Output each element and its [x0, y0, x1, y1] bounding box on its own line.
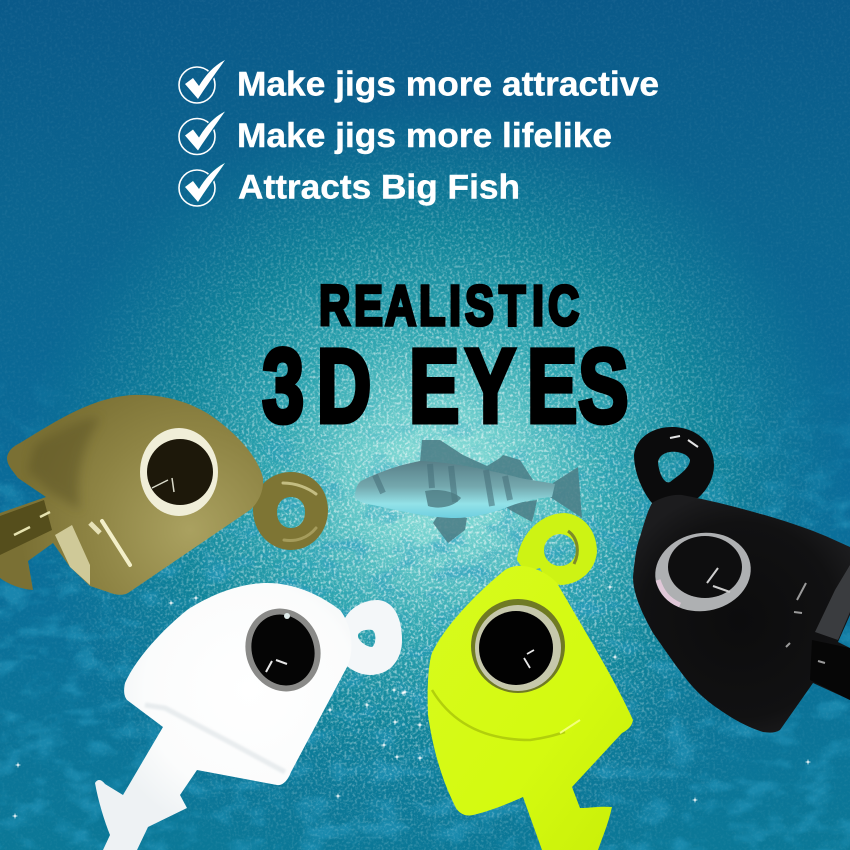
- eye: [471, 599, 565, 693]
- jig: olive: [0, 395, 328, 595]
- check item 2: Make jigs more lifelike: [237, 117, 612, 155]
- eye: [140, 428, 218, 516]
- check item 3: Attracts Big Fish: [238, 168, 520, 206]
- jig: black: [633, 427, 850, 733]
- eyelet: [517, 513, 597, 585]
- fins and tail: [420, 440, 582, 543]
- jig: lime: [428, 513, 633, 850]
- heading: REALISTIC: [319, 273, 579, 337]
- body and hook: [633, 495, 850, 733]
- stripes: [375, 464, 510, 506]
- heading: 3D EYES: [262, 328, 629, 445]
- check item 1: Make jigs more attractive: [237, 66, 659, 104]
- check item 3: [179, 163, 520, 206]
- body and hook: [428, 566, 633, 850]
- eyelet: [340, 600, 402, 675]
- body and hook: [0, 395, 263, 595]
- eye: [649, 525, 757, 619]
- fish: [355, 440, 582, 543]
- eyelet: [253, 472, 328, 550]
- checklist: [179, 60, 659, 206]
- heading: [262, 273, 629, 445]
- eye: [234, 598, 332, 702]
- eyelet: [634, 427, 714, 503]
- body: [355, 461, 555, 518]
- body and hook: [95, 583, 351, 850]
- jig: white: [95, 583, 402, 850]
